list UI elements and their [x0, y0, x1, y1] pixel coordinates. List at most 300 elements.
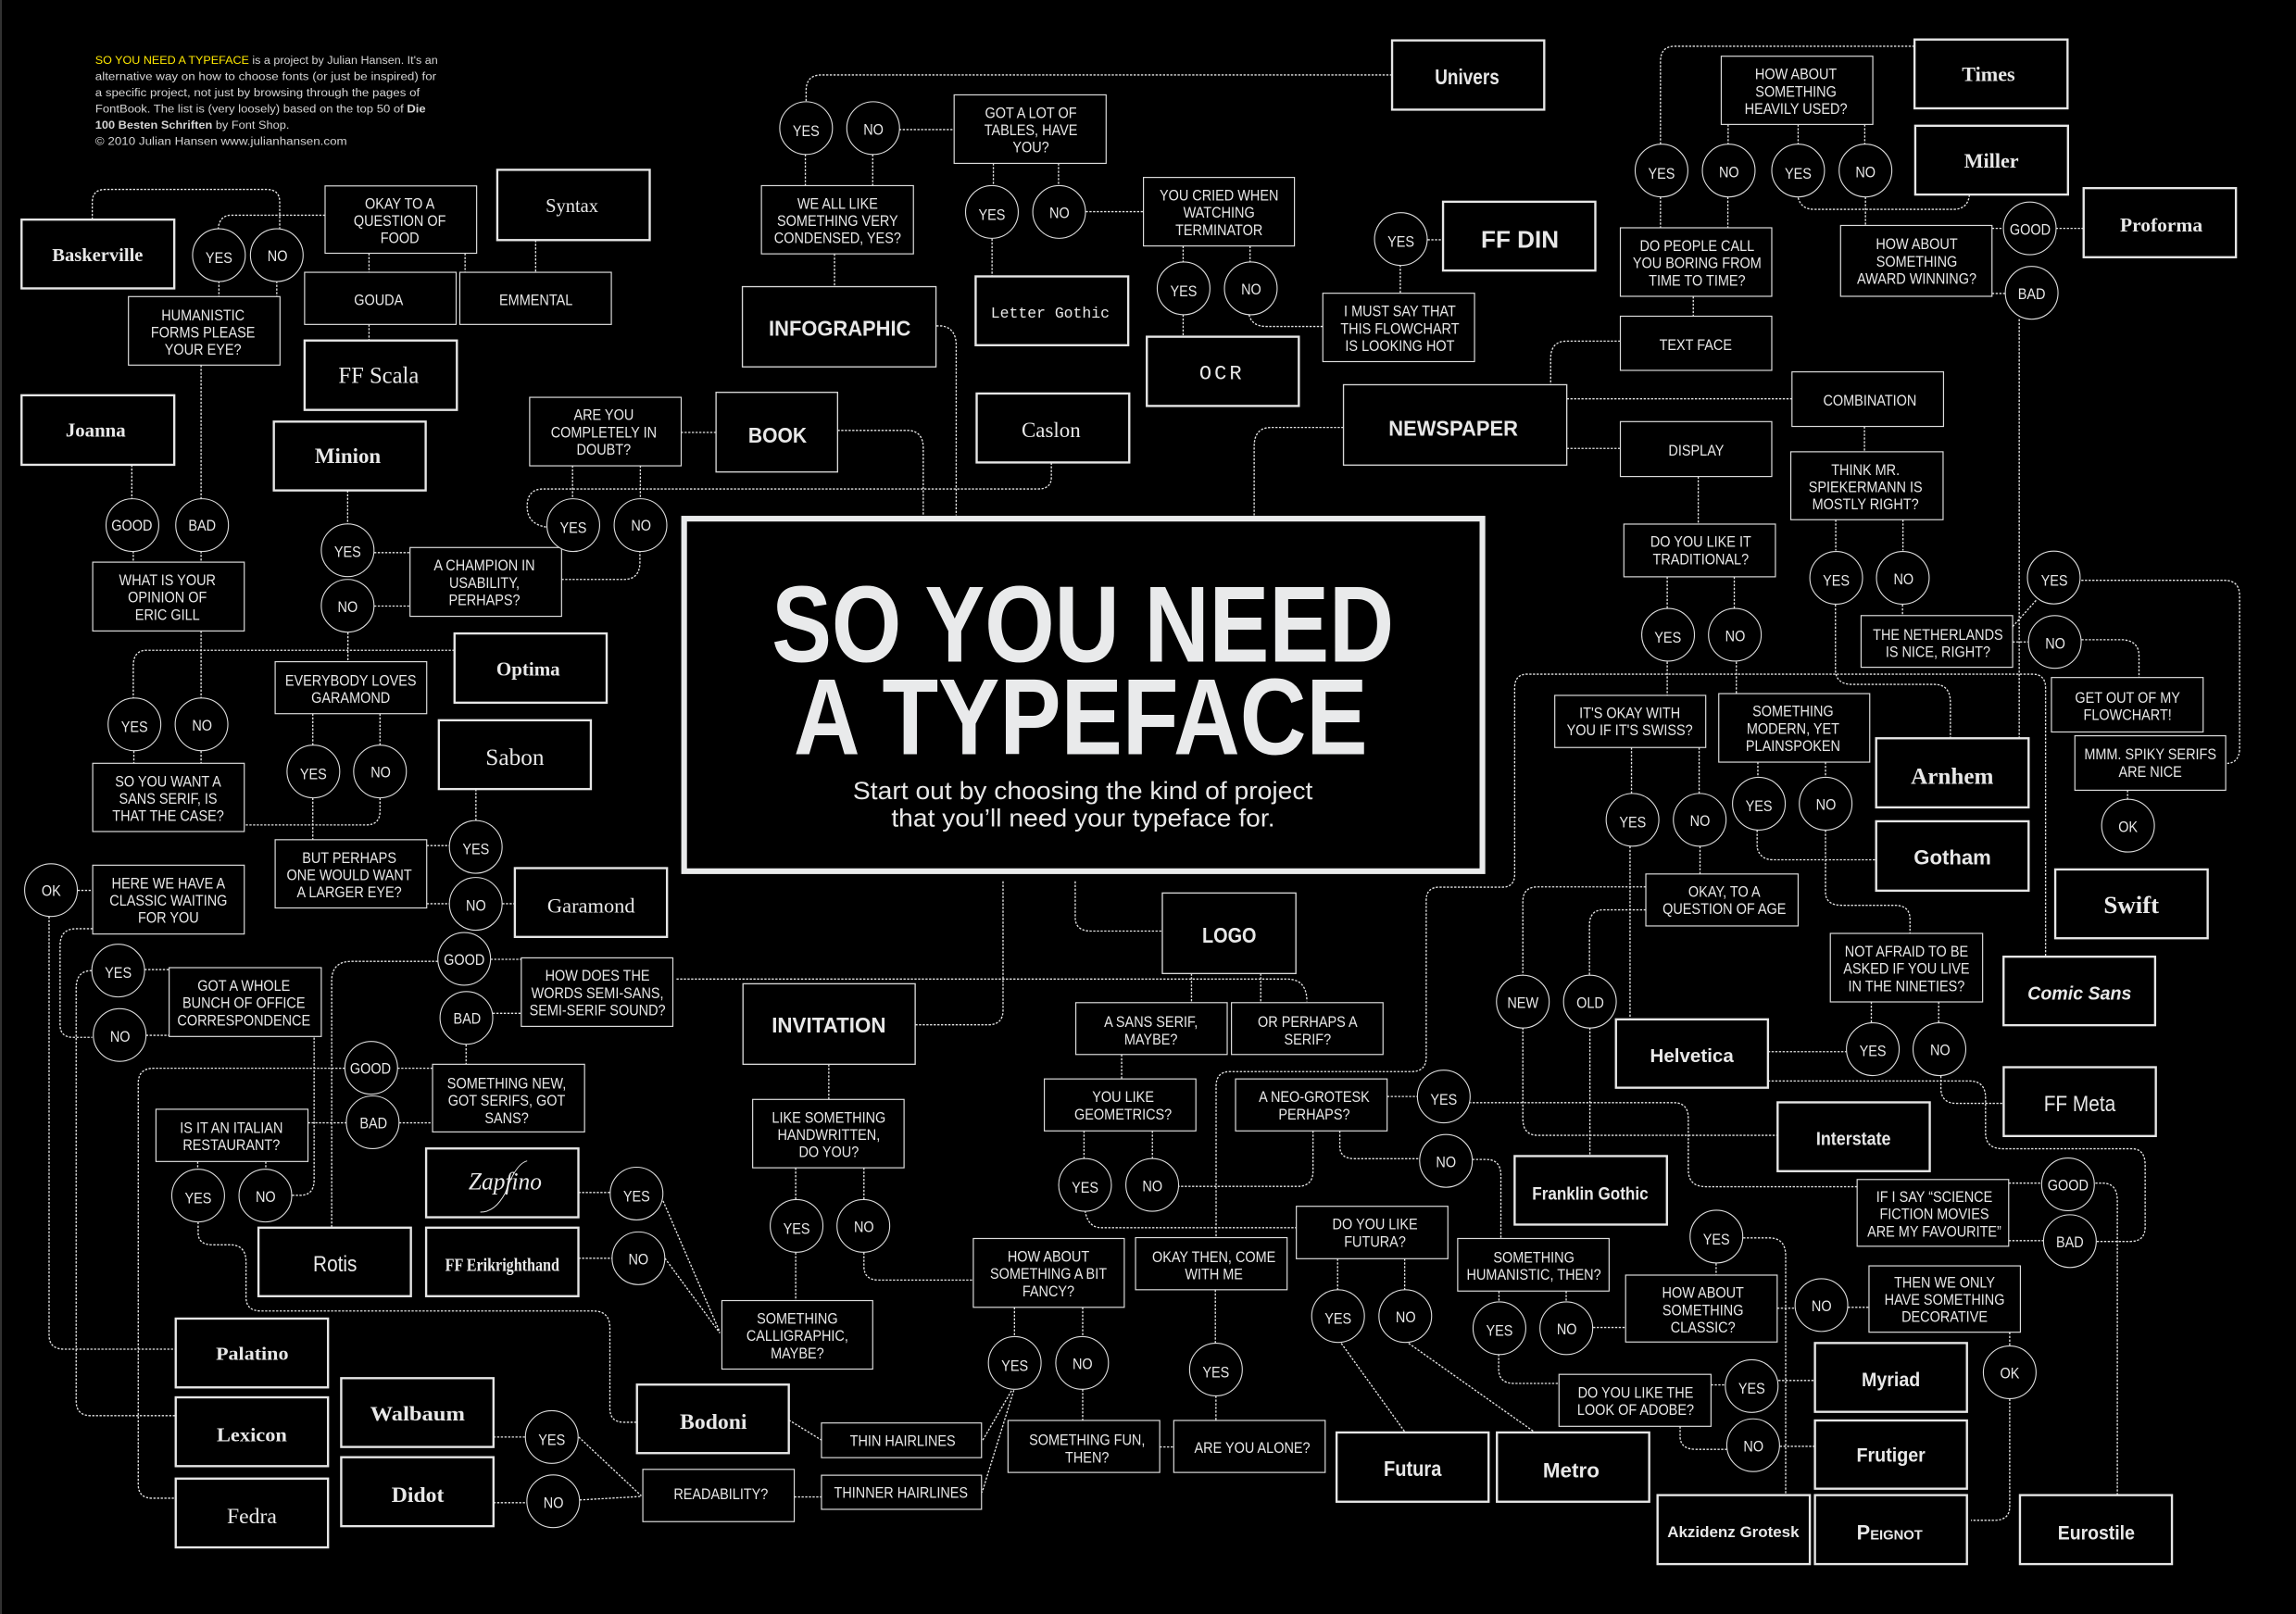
project type: infographic: INFOGRAPHIC: [769, 317, 911, 341]
question: okay to a question of food: QUESTION OF: [354, 213, 445, 230]
answer bubble: no: NO: [544, 1495, 563, 1512]
question: the netherlands: [1861, 616, 2013, 668]
question: how does semi-sans sound: WORDS SEMI-SANS,: [532, 985, 664, 1002]
intro text block: © 2010 Julian Hansen www.julianhansen.com: [95, 135, 347, 148]
question: humanistic forms: [129, 296, 280, 365]
question: a bit fancy: SOMETHING A BIT: [990, 1266, 1108, 1282]
statement: spiky serifs: ARE NICE: [2119, 764, 2182, 781]
question: something classic: CLASSIC?: [1671, 1320, 1736, 1336]
answer bubble: yes: YES: [300, 767, 327, 783]
question: something new: SANS?: [484, 1110, 529, 1127]
answer bubble: yes: YES: [334, 544, 361, 561]
answer bubble: no: NO: [1812, 1298, 1832, 1315]
typeface: frutiger: Frutiger: [1857, 1445, 1926, 1467]
question: we all like something condensed: [761, 185, 913, 254]
question: look of adobe: DO YOU LIKE THE: [1578, 1385, 1693, 1402]
answer bubble: no: NO: [110, 1029, 131, 1045]
question: a sans serif maybe: MAYBE?: [1124, 1032, 1178, 1048]
question: do people call you boring: TIME TO TIME?: [1649, 272, 1746, 290]
question: so you want a sans serif: THAT THE CASE?: [112, 808, 224, 825]
question: what is your opinion of eric gill: ERIC GILL: [135, 607, 200, 624]
typeface: proforma: [2084, 188, 2236, 257]
question: do people call you boring: DO PEOPLE CALL: [1640, 238, 1755, 255]
question: so you want a sans serif: [93, 763, 245, 832]
question: readability: [643, 1470, 795, 1521]
answer: text face: [1621, 316, 1772, 370]
answer bubble: yes: YES: [560, 520, 586, 537]
answer bubble: yes: [193, 229, 245, 282]
question: something new: GOT SERIFS, GOT: [448, 1093, 566, 1109]
question: a sans serif maybe: A SANS SERIF,: [1104, 1014, 1198, 1031]
statement: spiky serifs: MMM. SPIKY SERIFS: [2084, 746, 2216, 763]
typeface: walbaum: [341, 1378, 494, 1447]
question: something award winning: AWARD WINNING?: [1857, 271, 1976, 288]
question: this flowchart is looking hot: I MUST SAY THAT: [1344, 304, 1456, 320]
question: we all like something condensed: SOMETHING VERY: [777, 213, 898, 230]
answer bubble: no: NO: [1142, 1179, 1162, 1195]
typeface: syntax: Syntax: [546, 194, 598, 217]
answer bubble: no: [1726, 1419, 1779, 1471]
answer bubble: no: NO: [863, 122, 884, 139]
answer bubble: no: [449, 878, 502, 931]
answer bubble: no: NO: [1725, 629, 1745, 645]
answer bubble: good: GOOD: [2048, 1178, 2089, 1195]
question: how does semi-sans sound: HOW DOES THE: [546, 968, 650, 984]
question: live in the nineties: IN THE NINETIES?: [1849, 979, 1965, 995]
typeface: sabon: [439, 720, 591, 789]
answer bubble: yes: YES: [1738, 1381, 1765, 1397]
answer bubble: no: [1702, 144, 1755, 197]
typeface: didot: Didot: [392, 1483, 444, 1508]
typeface: swift: Swift: [2103, 891, 2159, 919]
question: the netherlands: THE NETHERLANDS: [1873, 627, 2003, 644]
answer bubble: no: [94, 1008, 146, 1061]
answer bubble: no: [837, 1199, 890, 1252]
question: but perhaps a larger eye: BUT PERHAPS: [302, 850, 396, 867]
project type: logo: [1162, 893, 1296, 973]
answer bubble: no: NO: [1073, 1357, 1093, 1373]
question: we all like something condensed: CONDENSED, YES?: [774, 231, 901, 247]
typeface: optima: [455, 633, 607, 703]
question: italian restaurant: [156, 1109, 308, 1161]
question: something classic: SOMETHING: [1662, 1303, 1743, 1320]
typeface: interstate: Interstate: [1816, 1128, 1891, 1149]
question: we all like something condensed: WE ALL LIKE: [797, 195, 878, 213]
answer bubble: no: [1800, 777, 1852, 830]
subtitle: that you’ll need your typeface for.: [891, 803, 1275, 832]
typeface: bodoni: Bodoni: [680, 1410, 747, 1434]
answer bubble: yes: [1690, 1210, 1743, 1263]
answer bubble: no: [250, 229, 303, 282]
question: look of adobe: LOOK OF ADOBE?: [1577, 1402, 1694, 1419]
typeface: franklin gothic: Franklin Gothic: [1532, 1184, 1649, 1204]
question: think mr spiekermann: [1791, 452, 1943, 519]
question: office correspondence: GOT A WHOLE: [197, 978, 290, 995]
question: are you alone: [1173, 1420, 1325, 1472]
typeface: caslon: Caslon: [1022, 419, 1081, 442]
question: okay if it's swiss: YOU IF IT'S SWISS?: [1567, 722, 1693, 739]
typeface: akzidenz grotesk: [1658, 1495, 1810, 1564]
answer bubble: no: NO: [466, 898, 486, 915]
answer bubble: no: NO: [1436, 1155, 1456, 1171]
question: the netherlands: IS NICE, RIGHT?: [1886, 644, 1990, 661]
question: you cried watching terminator: YOU CRIED WHEN: [1160, 188, 1278, 205]
question: everybody loves garamond: [275, 662, 427, 714]
typeface: garamond: [515, 869, 667, 937]
question: here we have a classic: HERE WE HAVE A: [112, 876, 226, 893]
answer bubble: no: [1126, 1158, 1179, 1211]
answer bubble: yes: YES: [1654, 630, 1681, 646]
question: do you like futura: DO YOU LIKE: [1332, 1217, 1418, 1233]
answer bubble: new: [1497, 975, 1549, 1028]
typeface: baskerville: [21, 219, 174, 288]
typeface: didot: [341, 1458, 494, 1526]
answer bubble: good: GOOD: [2010, 221, 2051, 239]
question: handwritten: DO YOU?: [798, 1145, 859, 1161]
question: something calligraphic: SOMETHING: [757, 1311, 838, 1328]
answer: combination: COMBINATION: [1823, 393, 1916, 409]
answer bubble: yes: [1810, 552, 1863, 604]
typeface: ff din: FF DIN: [1481, 225, 1559, 253]
question: office correspondence: CORRESPONDENCE: [177, 1012, 310, 1030]
typeface: miller: [1915, 126, 2068, 194]
answer bubble: yes: [1606, 794, 1659, 846]
question: a champion in usability: PERHAPS?: [448, 593, 521, 609]
question: science fiction movies: IF I SAY “SCIENCE: [1876, 1189, 1992, 1206]
answer bubble: yes: YES: [1072, 1180, 1098, 1196]
answer bubble: yes: [1473, 1302, 1525, 1355]
question: something award winning: HOW ABOUT: [1876, 236, 1958, 253]
typeface: joanna: [21, 395, 174, 465]
answer bubble: no: NO: [854, 1220, 874, 1236]
question: or perhaps a serif: SERIF?: [1285, 1032, 1331, 1048]
answer bubble: yes: YES: [2041, 573, 2068, 590]
answer bubble: yes: YES: [105, 965, 132, 982]
question: here we have a classic: [93, 865, 245, 934]
question: office correspondence: BUNCH OF OFFICE: [182, 995, 306, 1012]
typeface: times: [1914, 40, 2067, 108]
question: something award winning: SOMETHING: [1876, 254, 1957, 270]
answer bubble: yes: [1374, 213, 1427, 266]
typeface: palatino: [176, 1319, 328, 1387]
answer bubble: ok: OK: [2000, 1366, 2020, 1383]
answer bubble: yes: YES: [1703, 1232, 1730, 1248]
answer bubble: old: [1563, 975, 1616, 1028]
answer bubble: bad: [2005, 267, 2058, 319]
answer bubble: yes: [1311, 1290, 1364, 1343]
question: science fiction movies: [1857, 1180, 2009, 1246]
question: handwritten: [753, 1099, 904, 1168]
answer bubble: no: NO: [256, 1189, 276, 1206]
answer bubble: ok: OK: [42, 883, 61, 900]
question: a champion in usability: A CHAMPION IN: [433, 557, 535, 575]
answer bubble: yes: [321, 524, 374, 577]
answer bubble: no: [614, 499, 667, 552]
answer bubble: yes: YES: [1486, 1323, 1512, 1340]
question: something classic: HOW ABOUT: [1662, 1285, 1744, 1302]
answer bubble: good: [106, 499, 158, 552]
answer bubble: yes: YES: [1001, 1358, 1028, 1375]
typeface: rotis: Rotis: [313, 1253, 357, 1277]
question: readability: READABILITY?: [673, 1486, 769, 1503]
question: question of age: [1646, 874, 1798, 926]
question: you like geometrics: [1045, 1079, 1196, 1131]
answer bubble: no: NO: [1719, 164, 1739, 181]
question: do people call you boring: YOU BORING FROM: [1633, 256, 1762, 272]
question: live in the nineties: [1830, 933, 1983, 1002]
answer bubble: yes: YES: [1860, 1044, 1887, 1060]
answer: thinner hairlines: THINNER HAIRLINES: [834, 1485, 968, 1502]
statement: get out of my flowchart: [2051, 678, 2203, 732]
question: science fiction movies: FICTION MOVIES: [1879, 1207, 1989, 1223]
question: modern yet plainspoken: PLAINSPOKEN: [1746, 738, 1840, 755]
question: something classic: [1625, 1275, 1777, 1342]
question: something humanistic: [1458, 1238, 1609, 1291]
main title: SO YOU NEED: [772, 564, 1394, 685]
answer bubble: yes: YES: [121, 719, 148, 736]
answer bubble: yes: [108, 698, 161, 751]
typeface: syntax: [497, 169, 650, 240]
typeface: sabon: Sabon: [485, 744, 545, 770]
answer bubble: yes: YES: [784, 1221, 810, 1238]
answer bubble: no: NO: [338, 599, 358, 616]
answer bubble: no: [1839, 144, 1892, 197]
answer bubble: good: [2003, 202, 2056, 255]
answer bubble: yes: YES: [1387, 234, 1414, 251]
typeface: ff erikrighthand: FF Erikrighthand: [445, 1255, 559, 1275]
question: something fun: [1008, 1420, 1160, 1472]
typeface: comic sans: Comic Sans: [2027, 982, 2131, 1004]
intro text block: SO YOU NEED A TYPEFACE is a project by Julian Hansen. It's an: [95, 54, 438, 67]
typeface: ff scala: [305, 341, 457, 410]
project type: newspaper: [1344, 384, 1567, 465]
typeface: ocr: OCR: [1199, 362, 1242, 385]
answer: text face: TEXT FACE: [1660, 337, 1732, 354]
typeface: metro: Metro: [1543, 1459, 1600, 1483]
typeface: fedra: [176, 1479, 328, 1547]
question: okay to a question of food: FOOD: [381, 231, 420, 247]
typeface: baskerville: Baskerville: [52, 245, 143, 266]
answer bubble: no: [612, 1232, 665, 1284]
answer bubble: old: OLD: [1576, 995, 1604, 1012]
typeface: ff meta: FF Meta: [2044, 1092, 2115, 1117]
answer bubble: yes: YES: [1823, 573, 1850, 590]
question: but perhaps a larger eye: [275, 840, 427, 908]
project type: logo: LOGO: [1202, 923, 1256, 947]
question: okay if it's swiss: IT'S OKAY WITH: [1579, 706, 1680, 722]
project type: newspaper: NEWSPAPER: [1388, 416, 1518, 440]
answer bubble: yes: YES: [538, 1433, 565, 1449]
answer bubble: yes: [988, 1336, 1041, 1389]
question: got a lot of tables: TABLES, HAVE: [985, 122, 1077, 139]
answer bubble: no: [1224, 262, 1277, 315]
typeface: peignot: Peignot: [1857, 1521, 1923, 1545]
answer bubble: no: NO: [1855, 164, 1876, 181]
answer bubble: no: NO: [1049, 206, 1070, 222]
answer bubble: yes: [449, 820, 502, 873]
answer bubble: no: [1795, 1279, 1848, 1332]
answer bubble: no: [1379, 1290, 1432, 1343]
answer bubble: no: NO: [631, 518, 651, 534]
question: question of age: QUESTION OF AGE: [1662, 901, 1786, 918]
answer: thin hairlines: THIN HAIRLINES: [850, 1433, 956, 1450]
typeface: zapfino: Zapfino: [469, 1168, 542, 1195]
answer bubble: yes: YES: [1619, 815, 1646, 832]
answer bubble: ok: [2102, 799, 2154, 852]
answer bubble: yes: [2027, 551, 2080, 604]
answer bubble: yes: [1157, 262, 1210, 315]
statement: get out of my flowchart: GET OUT OF MY: [2075, 690, 2180, 707]
answer bubble: bad: [346, 1096, 399, 1148]
main title panel: [684, 519, 1483, 871]
question: okay then come with me: WITH ME: [1185, 1267, 1243, 1283]
answer bubble: yes: [547, 499, 599, 552]
answer bubble: yes: YES: [1648, 166, 1675, 182]
question: what is your opinion of eric gill: WHAT IS YOUR: [119, 572, 216, 589]
answer bubble: bad: BAD: [359, 1116, 387, 1132]
answer bubble: bad: BAD: [453, 1011, 481, 1028]
answer bubble: good: GOOD: [350, 1061, 391, 1078]
question: a bit fancy: FANCY?: [1023, 1283, 1074, 1300]
question: are you completely in doubt: COMPLETELY IN: [551, 425, 657, 442]
answer bubble: bad: [440, 992, 493, 1045]
answer bubble: no: [1709, 608, 1762, 661]
question: you cried watching terminator: TERMINATOR: [1175, 222, 1262, 239]
answer bubble: yes: [780, 102, 833, 155]
answer bubble: no: NO: [1396, 1309, 1416, 1326]
answer bubble: no: NO: [268, 248, 287, 265]
typeface: futura: Futura: [1384, 1457, 1442, 1481]
question: what is your opinion of eric gill: [93, 562, 245, 631]
typeface: myriad: Myriad: [1862, 1369, 1920, 1391]
question: got a lot of tables: [954, 94, 1106, 163]
question: everybody loves garamond: GARAMOND: [311, 690, 390, 707]
typeface: joanna: Joanna: [66, 419, 126, 442]
question: something calligraphic: [721, 1301, 872, 1370]
question: you cried watching terminator: [1144, 178, 1295, 246]
question: this flowchart is looking hot: IS LOOKING HOT: [1345, 338, 1455, 355]
question: how does semi-sans sound: SEMI-SERIF SOUND?: [530, 1003, 666, 1020]
typeface: arnhem: Arnhem: [1911, 764, 1993, 789]
question: got a lot of tables: YOU?: [1012, 140, 1049, 156]
answer bubble: bad: BAD: [188, 518, 216, 534]
project type: infographic: [743, 287, 936, 367]
typeface: walbaum: Walbaum: [370, 1402, 466, 1425]
question: this flowchart is looking hot: [1323, 294, 1474, 361]
typeface: myriad: [1815, 1343, 1967, 1412]
question: are you completely in doubt: ARE YOU: [573, 407, 634, 424]
answer bubble: no: [1540, 1302, 1593, 1355]
answer bubble: no: [1876, 552, 1929, 604]
question: live in the nineties: ASKED IF YOU LIVE: [1843, 961, 1970, 978]
typeface: eurostile: Eurostile: [2058, 1522, 2135, 1545]
answer bubble: yes: YES: [462, 842, 489, 858]
typeface: caslon: [977, 394, 1129, 462]
question: something heavily used: HOW ABOUT: [1755, 67, 1838, 83]
answer bubble: good: [2041, 1158, 2094, 1210]
question: a champion in usability: USABILITY,: [449, 575, 520, 592]
answer bubble: yes: YES: [184, 1191, 211, 1207]
question: modern yet plainspoken: MODERN, YET: [1747, 721, 1839, 738]
question: something award winning: [1840, 225, 1992, 296]
answer bubble: yes: YES: [1746, 798, 1773, 815]
answer: gouda: GOUDA: [354, 293, 404, 309]
answer bubble: yes: [1847, 1023, 1900, 1076]
question: so you want a sans serif: SANS SERIF, IS: [119, 791, 218, 807]
typeface: garamond: Garamond: [547, 895, 635, 918]
typeface: arnhem: [1876, 738, 2028, 807]
question: question of age: OKAY, TO A: [1688, 884, 1761, 901]
question: modern yet plainspoken: SOMETHING: [1752, 704, 1834, 720]
answer bubble: yes: [525, 1410, 578, 1463]
typeface: ff erikrighthand: [426, 1228, 579, 1296]
typeface: futura: [1336, 1433, 1488, 1502]
answer bubble: no: [1420, 1134, 1473, 1187]
answer bubble: yes: YES: [1430, 1092, 1457, 1108]
answer bubble: bad: BAD: [2056, 1234, 2084, 1251]
typeface: optima: Optima: [496, 657, 560, 680]
question: a neo-grotesk: A NEO-GROTESK: [1259, 1089, 1370, 1106]
typeface: minion: [274, 421, 426, 491]
question: or perhaps a serif: [1232, 1003, 1383, 1055]
question: something humanistic: SOMETHING: [1493, 1250, 1575, 1267]
question: do you like it traditional: [1624, 524, 1775, 577]
answer bubble: no: NO: [1743, 1439, 1763, 1456]
question: a neo-grotesk: PERHAPS?: [1278, 1107, 1350, 1123]
answer bubble: no: [1033, 185, 1085, 238]
question: a bit fancy: [973, 1238, 1124, 1307]
answer bubble: no: [527, 1475, 580, 1528]
question: handwritten: LIKE SOMETHING: [772, 1109, 885, 1127]
answer bubble: yes: [610, 1167, 663, 1220]
answer: thinner hairlines: [822, 1475, 982, 1509]
question: handwritten: HANDWRITTEN,: [777, 1127, 880, 1144]
answer bubble: yes: [1772, 144, 1825, 197]
question: science fiction movies: ARE MY FAVOURITE”: [1867, 1223, 2001, 1241]
question: you cried watching terminator: WATCHING: [1184, 205, 1255, 221]
question: do you like futura: [1297, 1207, 1448, 1258]
question: italian restaurant: IS IT AN ITALIAN: [180, 1120, 282, 1137]
question: only something decorative: THEN WE ONLY: [1894, 1275, 1995, 1292]
answer bubble: yes: YES: [1324, 1311, 1351, 1328]
answer bubble: yes: [1733, 777, 1786, 830]
typeface: lexicon: [176, 1397, 328, 1466]
question: so you want a sans serif: SO YOU WANT A: [115, 773, 221, 791]
answer bubble: yes: YES: [979, 207, 1005, 224]
answer bubble: yes: YES: [1202, 1365, 1229, 1382]
answer bubble: no: [321, 580, 374, 632]
question: do people call you boring: [1621, 228, 1772, 296]
intro text block: a specific project, not just by browsing through the pages of: [95, 86, 420, 99]
question: but perhaps a larger eye: ONE WOULD WANT: [287, 868, 412, 884]
answer bubble: good: GOOD: [444, 952, 484, 969]
answer bubble: no: NO: [2045, 636, 2065, 653]
question: okay to a question of food: [325, 186, 477, 254]
answer bubble: yes: [1642, 608, 1695, 661]
question: live in the nineties: NOT AFRAID TO BE: [1845, 944, 1968, 960]
answer bubble: yes: [771, 1199, 823, 1252]
question: modern yet plainspoken: [1719, 694, 1870, 762]
answer bubble: no: [1056, 1336, 1109, 1389]
typeface: gotham: [1876, 821, 2028, 891]
answer bubble: ok: OK: [2118, 820, 2139, 836]
typeface: palatino: Palatino: [216, 1345, 288, 1365]
project type: invitation: [743, 983, 915, 1064]
typeface: eurostile: [2020, 1495, 2172, 1564]
typeface: gotham: Gotham: [1913, 845, 1991, 869]
answer bubble: bad: BAD: [2018, 286, 2045, 303]
answer: emmental: [459, 272, 611, 324]
